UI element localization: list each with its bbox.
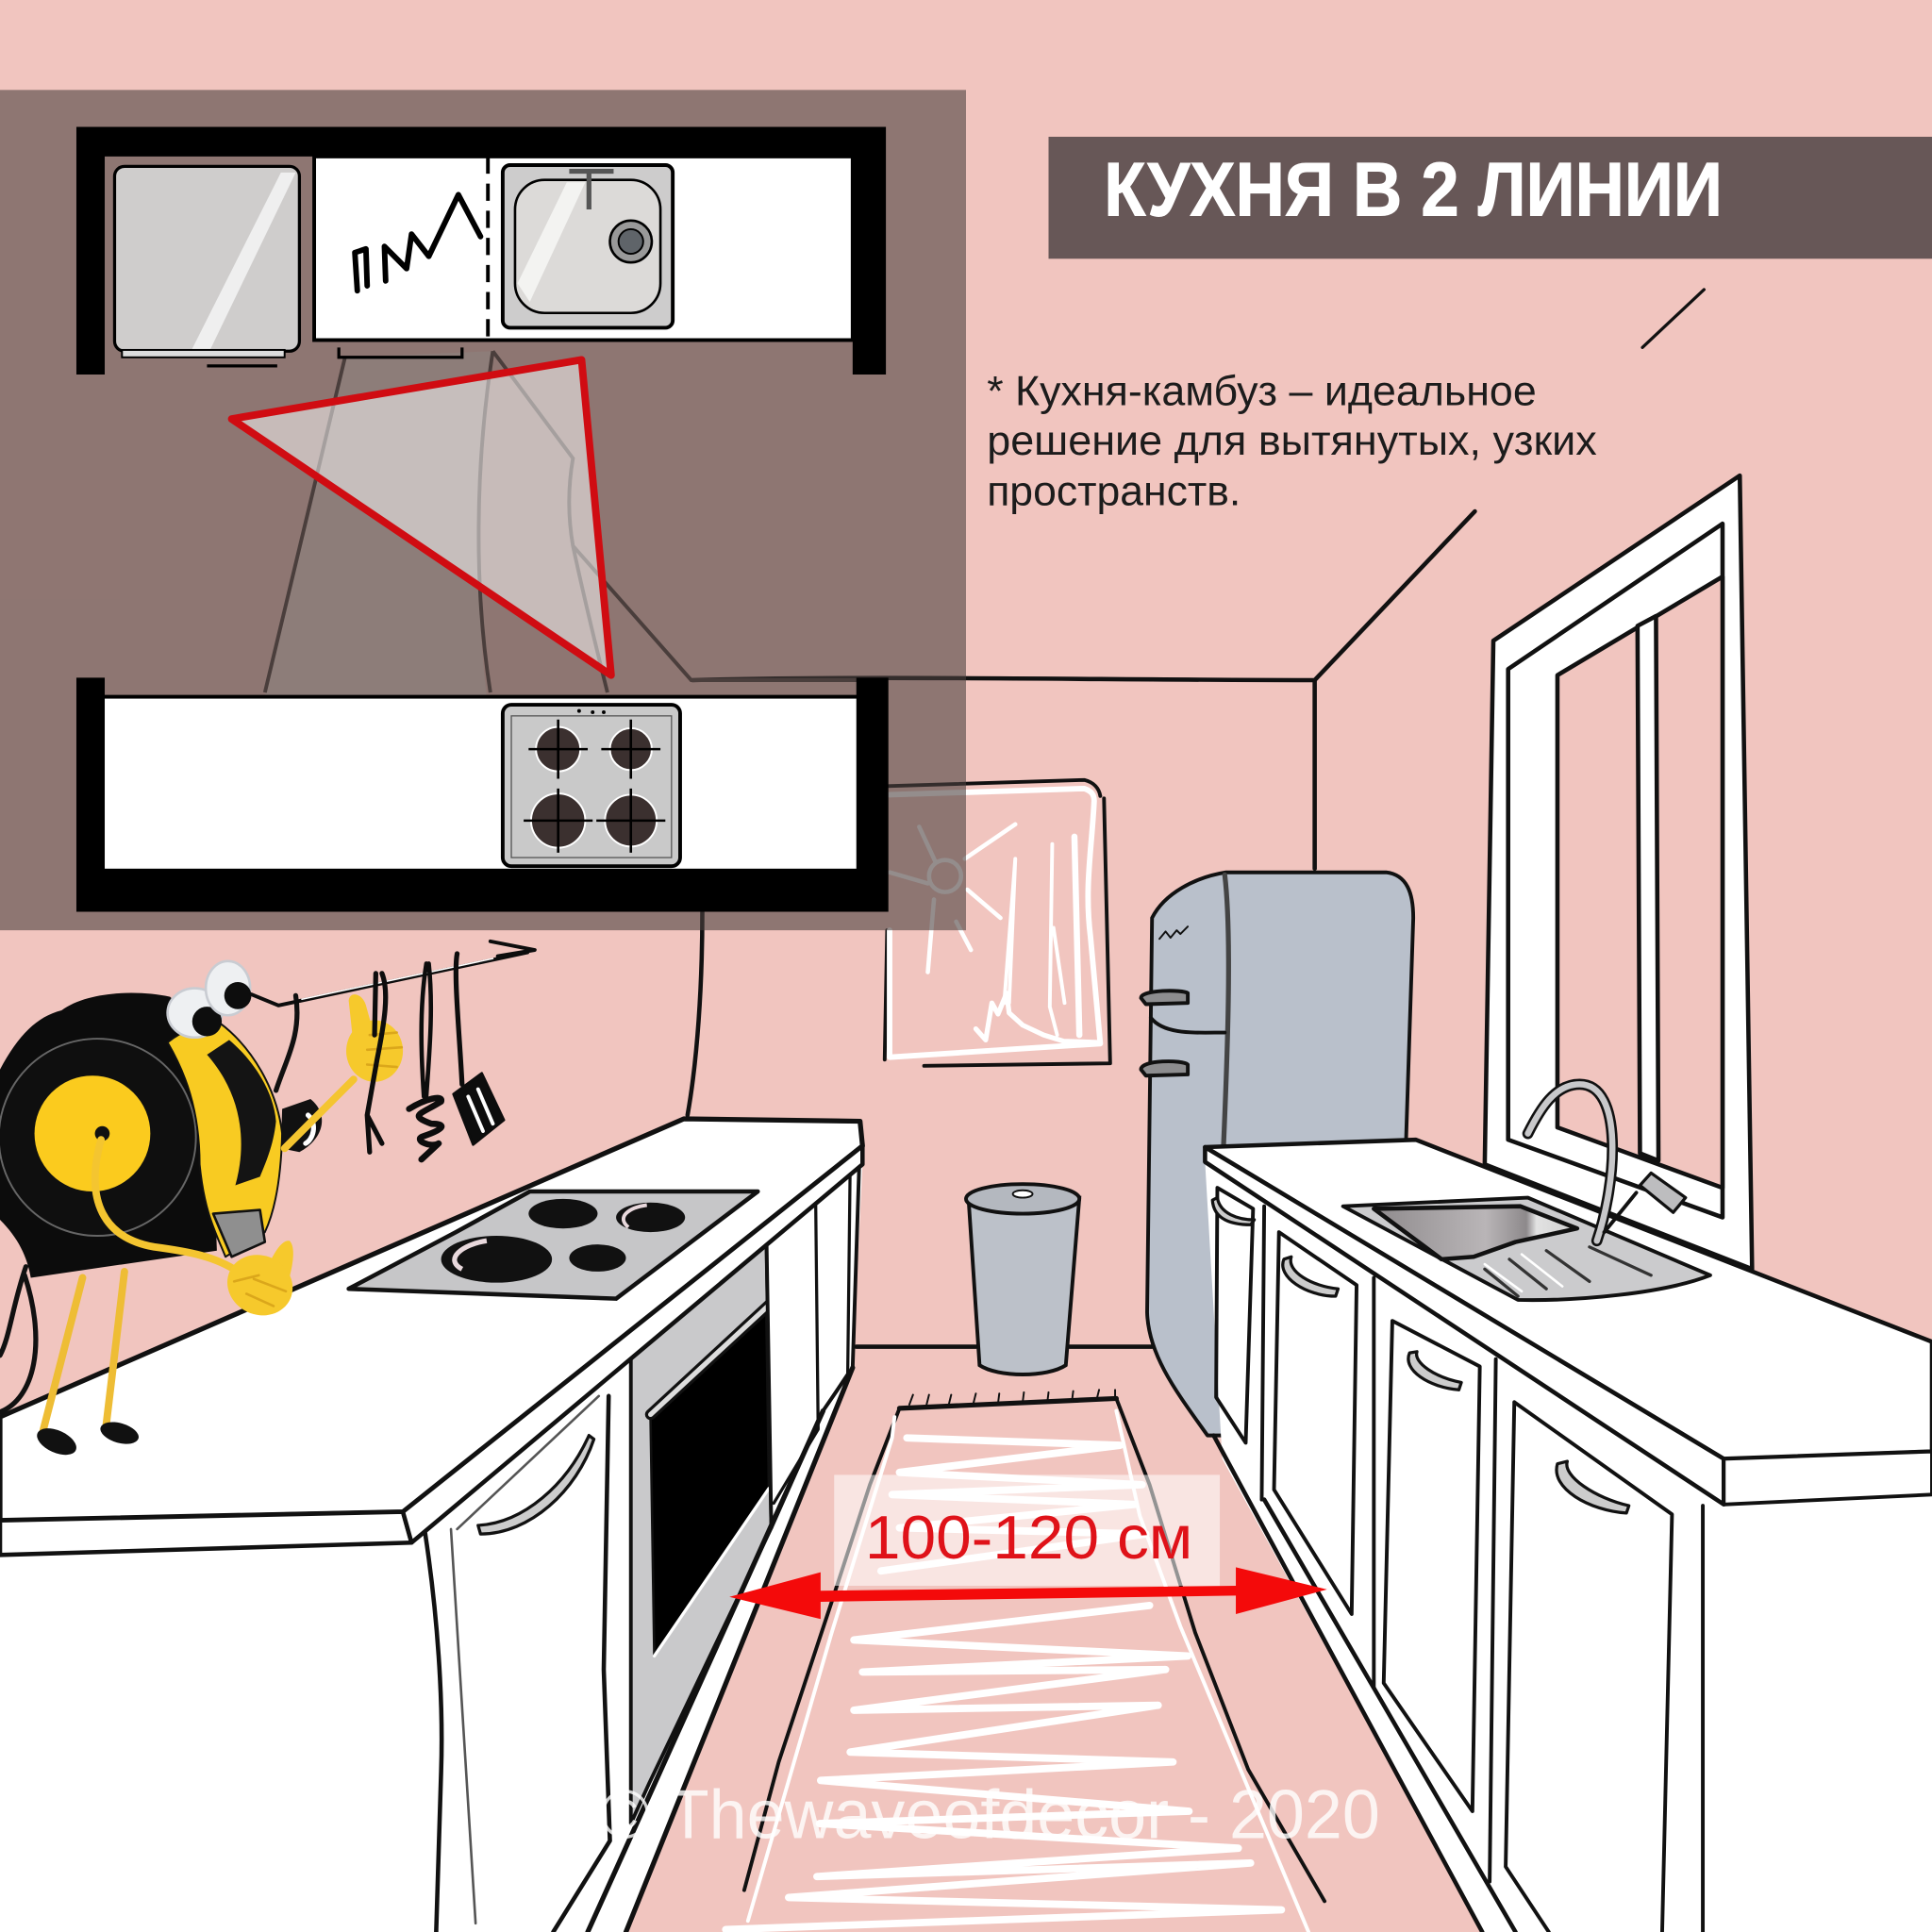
refrigerator xyxy=(1141,873,1413,1436)
rear handle xyxy=(281,1099,322,1152)
work triangle xyxy=(232,359,611,675)
shoes xyxy=(33,1418,142,1460)
title: КУХНЯ В 2 ЛИНИИ xyxy=(1104,148,1723,233)
lower wall frame xyxy=(76,677,889,912)
arms xyxy=(95,1079,354,1272)
double arrow xyxy=(729,1567,1327,1619)
cabinet base xyxy=(1205,1162,1932,1932)
cooktop xyxy=(349,1191,758,1299)
floor and plinth lines xyxy=(1214,1436,1516,1932)
floor and plinth lines xyxy=(588,1368,853,1932)
countertop xyxy=(1205,1140,1932,1458)
power cable xyxy=(0,1267,36,1412)
note text: пространств. xyxy=(987,469,1241,515)
upper thumbs-up hand xyxy=(346,994,403,1082)
tape body xyxy=(0,993,217,1277)
counter front strip xyxy=(1724,1452,1932,1505)
left counter and cabinets xyxy=(0,1119,862,1932)
right counter and cabinets xyxy=(1205,1140,1932,1932)
counter edge xyxy=(1205,1147,1724,1505)
note text xyxy=(987,369,1597,515)
plan hob xyxy=(503,705,680,866)
door handles xyxy=(1212,1198,1629,1513)
dimension label: 100-120 см xyxy=(865,1503,1192,1572)
floor plan panel xyxy=(0,90,966,930)
reel hole xyxy=(95,1126,109,1141)
lower counter xyxy=(105,699,857,869)
far cabinets xyxy=(766,1140,860,1528)
note text: решение для вытянутых, узких xyxy=(987,418,1597,464)
plan fridge xyxy=(114,166,462,366)
dashed divider xyxy=(487,157,490,340)
plan sink xyxy=(503,165,673,327)
utensil rail with tools xyxy=(251,941,535,1159)
cabinet doors xyxy=(1216,1188,1703,1932)
oven body xyxy=(631,1239,772,1824)
upper wall frame xyxy=(76,127,886,375)
room corner lines xyxy=(688,290,1704,1347)
ghost wall strokes xyxy=(265,351,887,692)
title banner xyxy=(1049,137,1932,258)
tape reel xyxy=(0,1039,196,1236)
width dimension callout xyxy=(729,1474,1327,1619)
wall poster xyxy=(885,780,1110,1066)
metal tab xyxy=(213,1210,265,1257)
ghost perspective lines xyxy=(265,351,492,696)
window xyxy=(1485,475,1752,1269)
trash bin xyxy=(966,1184,1079,1374)
measuring tape mascot xyxy=(0,961,403,1460)
watermark: © Thewaveofdecor - 2020 xyxy=(600,1777,1380,1854)
plan backdrop xyxy=(0,90,966,930)
legs xyxy=(43,1272,125,1430)
counter side edge xyxy=(403,1146,862,1542)
upper counter xyxy=(314,157,853,340)
oven handle xyxy=(651,1293,781,1414)
note text: * Кухня-камбуз – идеальное xyxy=(987,369,1537,415)
counter front edge xyxy=(0,1512,411,1555)
oven window xyxy=(651,1313,769,1656)
sink with faucet xyxy=(1343,1084,1710,1300)
case slot xyxy=(207,1040,276,1185)
tape front case xyxy=(168,1023,282,1257)
near door lines xyxy=(425,1396,610,1932)
cabinet base xyxy=(0,1164,862,1932)
countertop xyxy=(0,1119,862,1521)
lower thumbs-up hand xyxy=(217,1241,303,1326)
eyes xyxy=(168,989,222,1038)
runner rug xyxy=(725,1390,1324,1932)
reel yellow disc xyxy=(35,1075,150,1191)
counter scribble xyxy=(355,194,480,291)
